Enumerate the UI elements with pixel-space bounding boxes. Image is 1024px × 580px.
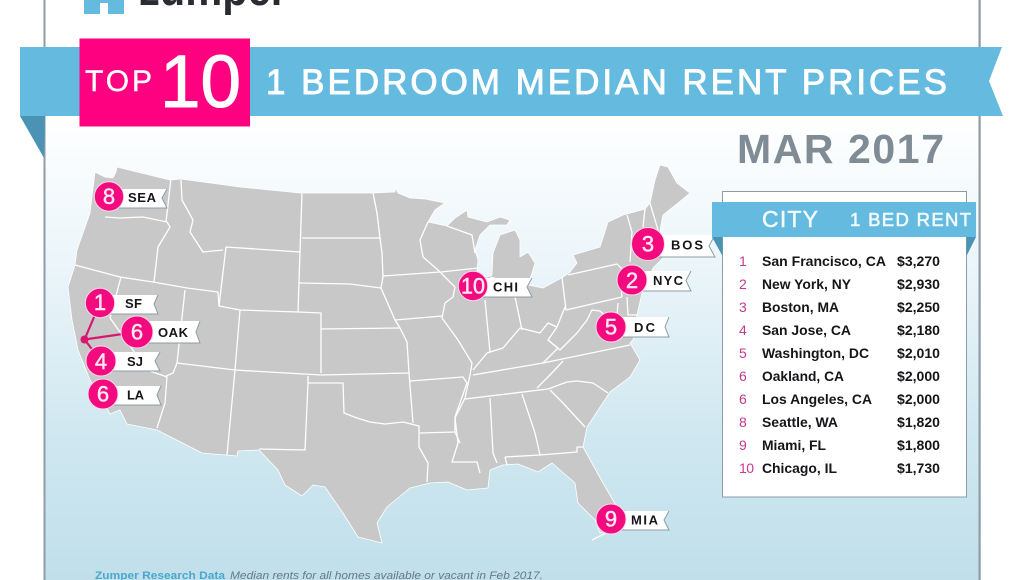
footer source note [95,570,543,580]
marker: SJ: SJ [127,354,143,369]
badge: top 10 [80,38,250,126]
table rows: Chicago, IL [762,460,837,476]
table rows: 4 [739,322,747,338]
panel: ranking table [712,192,976,497]
table rows: $2,180 [897,322,940,338]
marker: DC: DC [634,320,656,335]
table rows: 2 [739,276,747,292]
table rows: 8 [739,414,747,430]
title ribbon: 1 BEDROOM MEDIAN RENT PRICES [266,63,947,102]
table rows: 5 [739,345,747,361]
marker: MIA: 9 [605,506,617,532]
connector lines: bay area [80,303,137,361]
table rows: $2,250 [897,299,940,315]
marker: LA: LA [127,388,145,402]
table rows: 9 [739,437,747,453]
table rows: $1,820 [897,414,940,430]
marker: SJ: 4 [95,349,107,374]
table rows: 10 [739,460,754,476]
marker: OAK [121,316,200,348]
marker: NYC: NYC [653,273,684,288]
marker: DC: 5 [605,314,617,340]
marker: MIA [596,504,669,534]
table rows: Seattle, WA [762,414,838,430]
marker: OAK: 6 [131,320,143,344]
table rows: Oakland, CA [762,368,844,384]
table rows: $2,000 [897,391,940,407]
badge: top 10: 10 [160,40,241,123]
table header band: 1 BED RENT [850,209,971,230]
marker: BOS [632,228,715,260]
table rows: Boston, MA [762,299,839,315]
marker: CHI [458,271,532,301]
marker: SF [85,288,158,318]
table rows: $2,000 [897,368,940,384]
badge: top 10: TOP [85,65,152,98]
marker: SEA [94,182,167,211]
table header band: CITY [762,206,818,232]
marker: SEA: SEA [128,190,157,205]
marker: SEA: 8 [103,184,115,209]
title ribbon [20,47,1003,158]
map: United States [68,165,690,543]
marker: BOS: 3 [642,232,654,256]
marker: DC [596,312,669,342]
table rows: San Francisco, CA [762,253,886,269]
marker: CHI: 10 [461,274,485,298]
table rows: Washington, DC [762,345,869,361]
marker: OAK: OAK [158,325,189,340]
table header band [712,202,976,256]
marker: CHI: CHI [493,280,518,294]
marker: SF: SF [125,296,142,311]
table rows: 1 [739,253,747,269]
marker: NYC: 2 [626,268,638,293]
table rows: 6 [739,391,747,407]
date heading: MAR 2017 [737,126,944,172]
marker: NYC [617,265,691,295]
table rows: San Jose, CA [762,322,851,338]
marker: LA [88,379,161,409]
table rows: $1,800 [897,437,940,453]
table rows: $2,930 [897,276,940,292]
marker: SF: 1 [94,290,106,315]
marker: SJ [86,346,160,376]
logo: zumper [84,0,287,16]
table rows: Miami, FL [762,437,826,453]
marker: MIA: MIA [631,512,659,528]
table rows: 3 [739,299,747,315]
marker: LA: 6 [97,382,109,406]
state borders [75,178,658,540]
table rows [739,253,940,476]
table rows: Los Angeles, CA [762,391,872,407]
table rows: $1,730 [897,460,940,476]
table rows: $2,010 [897,345,940,361]
table rows: New York, NY [762,276,852,292]
table rows: $3,270 [897,253,940,269]
marker: BOS: BOS [671,238,703,252]
table rows: 6 [739,368,747,384]
